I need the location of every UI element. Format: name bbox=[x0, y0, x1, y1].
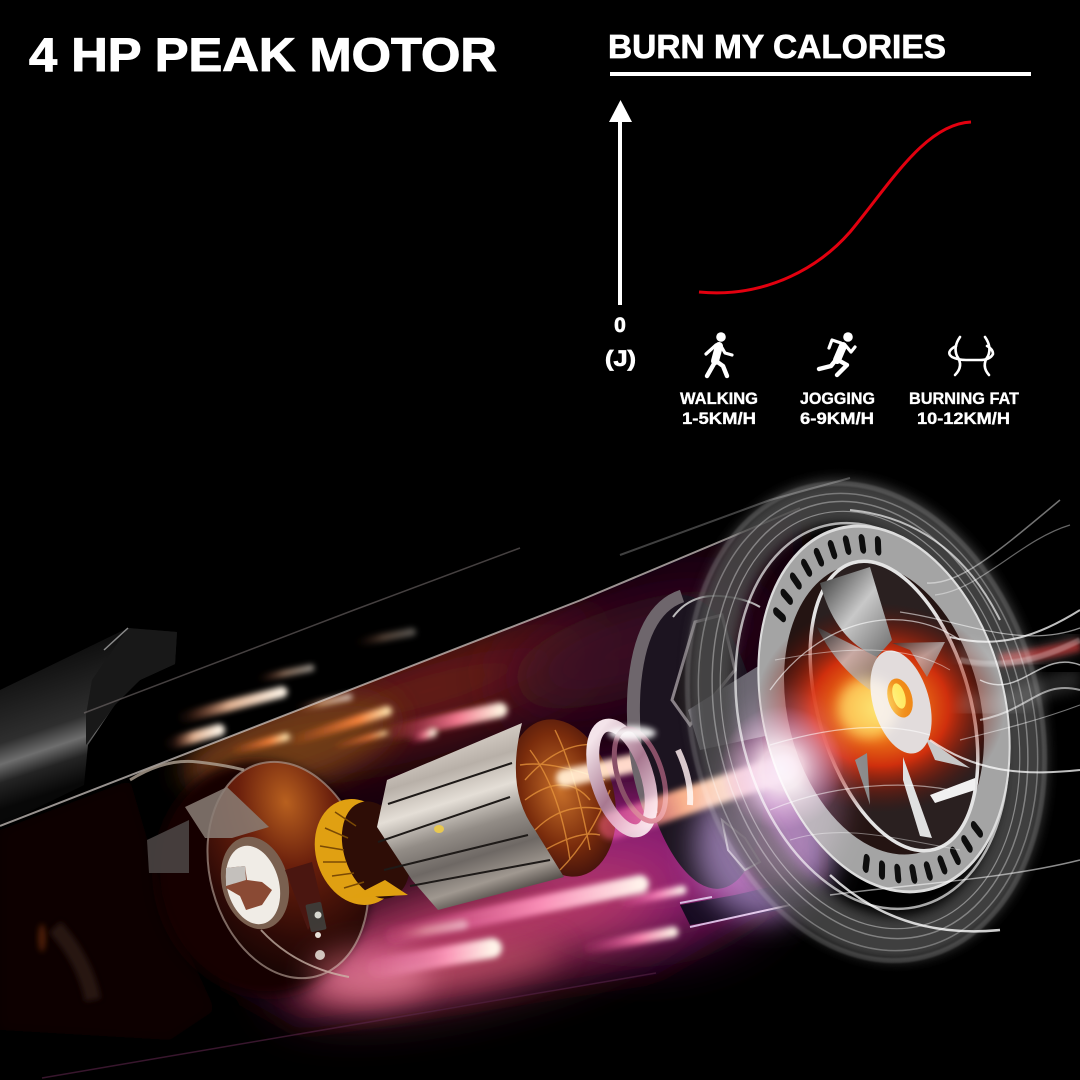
axis label: zero joules: (J) bbox=[605, 346, 636, 371]
swirl motion rings bbox=[639, 445, 1080, 999]
label: burning fat bbox=[909, 389, 1020, 428]
icon: jogging person bbox=[819, 332, 855, 375]
hub bbox=[859, 643, 943, 761]
gold commutator bbox=[301, 788, 422, 916]
fan blades bbox=[817, 567, 975, 838]
label: burning fat: BURNING FAT bbox=[909, 389, 1020, 408]
icon: walking person bbox=[706, 332, 732, 376]
label: jogging: JOGGING bbox=[800, 389, 875, 408]
speed light streaks bbox=[172, 632, 682, 968]
axis label: zero joules bbox=[605, 314, 636, 371]
panel: burn my calories chart bbox=[605, 29, 1031, 428]
red calorie curve bbox=[699, 122, 971, 293]
end bell housing bbox=[130, 737, 394, 1019]
silver rotor core bbox=[377, 723, 564, 910]
tube edge highlight lines bbox=[0, 508, 800, 1078]
bearing ring bbox=[581, 718, 676, 838]
perforated metal ring bbox=[722, 499, 1046, 919]
title: 4 HP PEAK MOTOR bbox=[29, 28, 497, 81]
axis label: zero joules: 0 bbox=[614, 314, 626, 337]
red tail glow bbox=[1000, 645, 1080, 660]
core glow bbox=[755, 603, 1005, 813]
motor tube body bbox=[173, 500, 820, 1030]
back pulley wheel bbox=[618, 587, 810, 927]
shaft glow to ring bbox=[565, 762, 640, 778]
y axis arrow bbox=[609, 100, 632, 305]
purple haze under wheel bbox=[695, 770, 835, 920]
copper winding bbox=[492, 708, 632, 888]
label: walking: 1-5KM/H bbox=[682, 409, 756, 428]
fan wheel bbox=[722, 499, 1046, 919]
fan interior bbox=[780, 542, 1008, 870]
label: jogging bbox=[800, 389, 875, 428]
illustration: motor cutaway bbox=[0, 445, 1080, 1078]
bearing disc bbox=[211, 829, 299, 937]
label: burning fat: 10-12KM/H bbox=[917, 409, 1010, 428]
label: walking bbox=[680, 389, 758, 428]
left dark motor housing bbox=[0, 628, 215, 1040]
air flow wisps bbox=[620, 478, 1080, 895]
label: jogging: 6-9KM/H bbox=[800, 409, 874, 428]
label: walking: WALKING bbox=[680, 389, 758, 408]
chart heading: BURN MY CALORIES bbox=[608, 29, 946, 66]
icon: waist with tape measure bbox=[949, 337, 993, 375]
pink glow over bell edge bbox=[310, 947, 430, 1003]
light beam bbox=[612, 678, 898, 885]
